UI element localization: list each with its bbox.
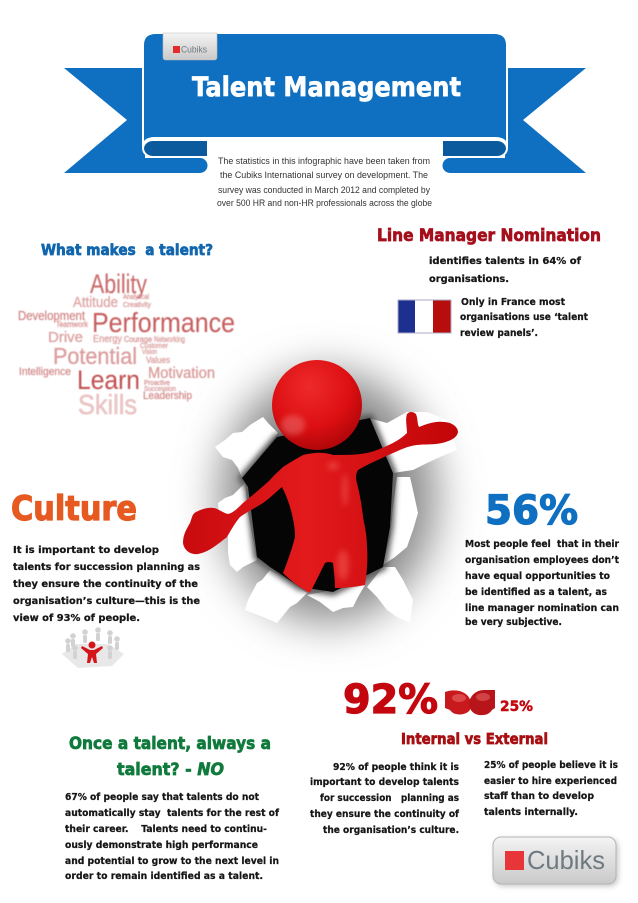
icon: circle of people with red leader <box>62 627 124 668</box>
figure body <box>183 412 458 593</box>
Cubiks logo: Cubiks <box>527 845 605 875</box>
intro text: the Cubiks International survey on development. The <box>220 170 428 180</box>
intro text: The statistics in this infographic have been taken from <box>218 156 430 166</box>
56% text: be identified as a talent, as <box>465 587 607 598</box>
internal text: important to develop talents <box>310 777 459 788</box>
word cloud: Attitude <box>73 294 118 311</box>
once a talent text: order to remain identified as a talent. <box>65 871 263 882</box>
internal text: the organisation’s culture. <box>323 825 459 836</box>
word cloud: Courage <box>124 335 153 344</box>
56% text: have equal opportunities to <box>465 571 610 582</box>
culture text <box>13 545 200 624</box>
internal text <box>310 762 460 836</box>
small Cubiks tab <box>163 33 217 60</box>
icon: boxing gloves <box>445 690 495 715</box>
line manager text: organisations. <box>429 274 509 285</box>
stat: 92%: 92% <box>343 677 438 723</box>
word cloud: Ability <box>90 269 147 299</box>
word cloud: Energy <box>93 334 122 345</box>
intro text: survey was conducted in March 2012 and completed by <box>218 185 430 195</box>
heading: what makes a talent: What makes a talent? <box>41 241 213 259</box>
heading: culture: Culture <box>11 489 137 529</box>
culture text: talents for succession planning as <box>13 562 200 573</box>
header banner <box>64 33 586 173</box>
external text: easier to hire experienced <box>484 776 617 787</box>
figure head <box>272 360 362 450</box>
heading: once a talent: talent? - NO <box>117 760 224 780</box>
line manager text: identifies talents in 64% of <box>429 256 582 267</box>
56% text: Most people feel that in their <box>465 539 619 550</box>
internal text: they ensure the continuity of <box>310 809 460 820</box>
Cubiks logo <box>493 837 618 886</box>
paper shadow <box>220 372 436 622</box>
word cloud: Creativity <box>123 300 151 309</box>
small Cubiks tab: Cubiks <box>181 44 207 56</box>
once a talent text: their career. Talents need to continu- <box>65 824 267 835</box>
internal text: for succession planning as <box>320 793 459 804</box>
once a talent text: and potential to grow to the next level in <box>65 856 279 867</box>
56% text: be very subjective. <box>465 617 562 628</box>
title: Talent Management <box>192 72 461 103</box>
France text: Only in France most <box>461 297 565 308</box>
external text: 25% of people believe it is <box>484 760 618 771</box>
icon: French flag <box>398 300 451 333</box>
intro text <box>217 156 432 208</box>
line manager text <box>429 256 582 285</box>
external text: talents internally. <box>484 807 578 818</box>
once a talent text: ously demonstrate high performance <box>65 840 258 851</box>
stat: 56%: 56% <box>485 488 578 534</box>
word cloud: Performance <box>92 307 235 338</box>
word cloud <box>18 269 235 420</box>
word cloud: Drive <box>48 329 83 346</box>
word cloud: Vision <box>142 349 157 356</box>
culture text: view of 93% of people. <box>13 613 140 624</box>
once a talent text: automatically stay talents for the rest of <box>65 808 280 819</box>
once a talent text <box>65 792 280 882</box>
culture text: they ensure the continuity of the <box>13 579 198 590</box>
once a talent text: 67% of people say that talents do not <box>65 792 259 803</box>
internal text: 92% of people think it is <box>333 762 459 773</box>
heading: once a talent: Once a talent, always a <box>69 734 271 754</box>
intro text: over 500 HR and non-HR professionals across the globe <box>217 198 432 208</box>
word cloud: Proactive <box>144 380 170 387</box>
56% text: organisation employees don’t <box>465 555 619 566</box>
external text <box>484 760 618 818</box>
word cloud: Development <box>18 309 85 323</box>
figure highlights <box>327 462 349 580</box>
word cloud: Customer <box>140 343 169 350</box>
heading: once a talent <box>69 734 271 780</box>
France text: organisations use ‘talent <box>460 312 588 323</box>
word cloud: Succession <box>144 386 176 393</box>
heading: internal vs external: Internal vs External <box>401 730 548 748</box>
central illustration: red figure bursting through paper <box>183 360 458 623</box>
culture text: It is important to develop <box>13 545 159 556</box>
dark hole <box>242 418 393 592</box>
word cloud: Values <box>146 355 170 365</box>
word cloud: Intelligence <box>19 366 71 378</box>
France text: review panels’. <box>460 328 538 339</box>
heading: line manager nomination: Line Manager Nomination <box>377 226 601 246</box>
external text: staff than to develop <box>484 791 594 802</box>
word cloud: Teamwork <box>56 320 89 329</box>
56% text: line manager nomination can <box>465 603 619 614</box>
word cloud: Motivation <box>148 365 215 382</box>
56% text <box>465 539 619 628</box>
word cloud: Analytical <box>123 294 149 301</box>
word cloud: Leadership <box>143 390 192 402</box>
word cloud: Networking <box>154 335 185 344</box>
France text <box>460 297 588 339</box>
word cloud: Learn <box>77 365 140 395</box>
culture text: organisation’s culture—this is the <box>13 596 200 607</box>
word cloud: Potential <box>53 343 137 369</box>
torn paper flaps <box>215 412 457 623</box>
inner hole shadow on the paper <box>242 418 393 592</box>
stat: 25%: 25% <box>500 699 533 715</box>
word cloud: Skills <box>78 389 137 420</box>
